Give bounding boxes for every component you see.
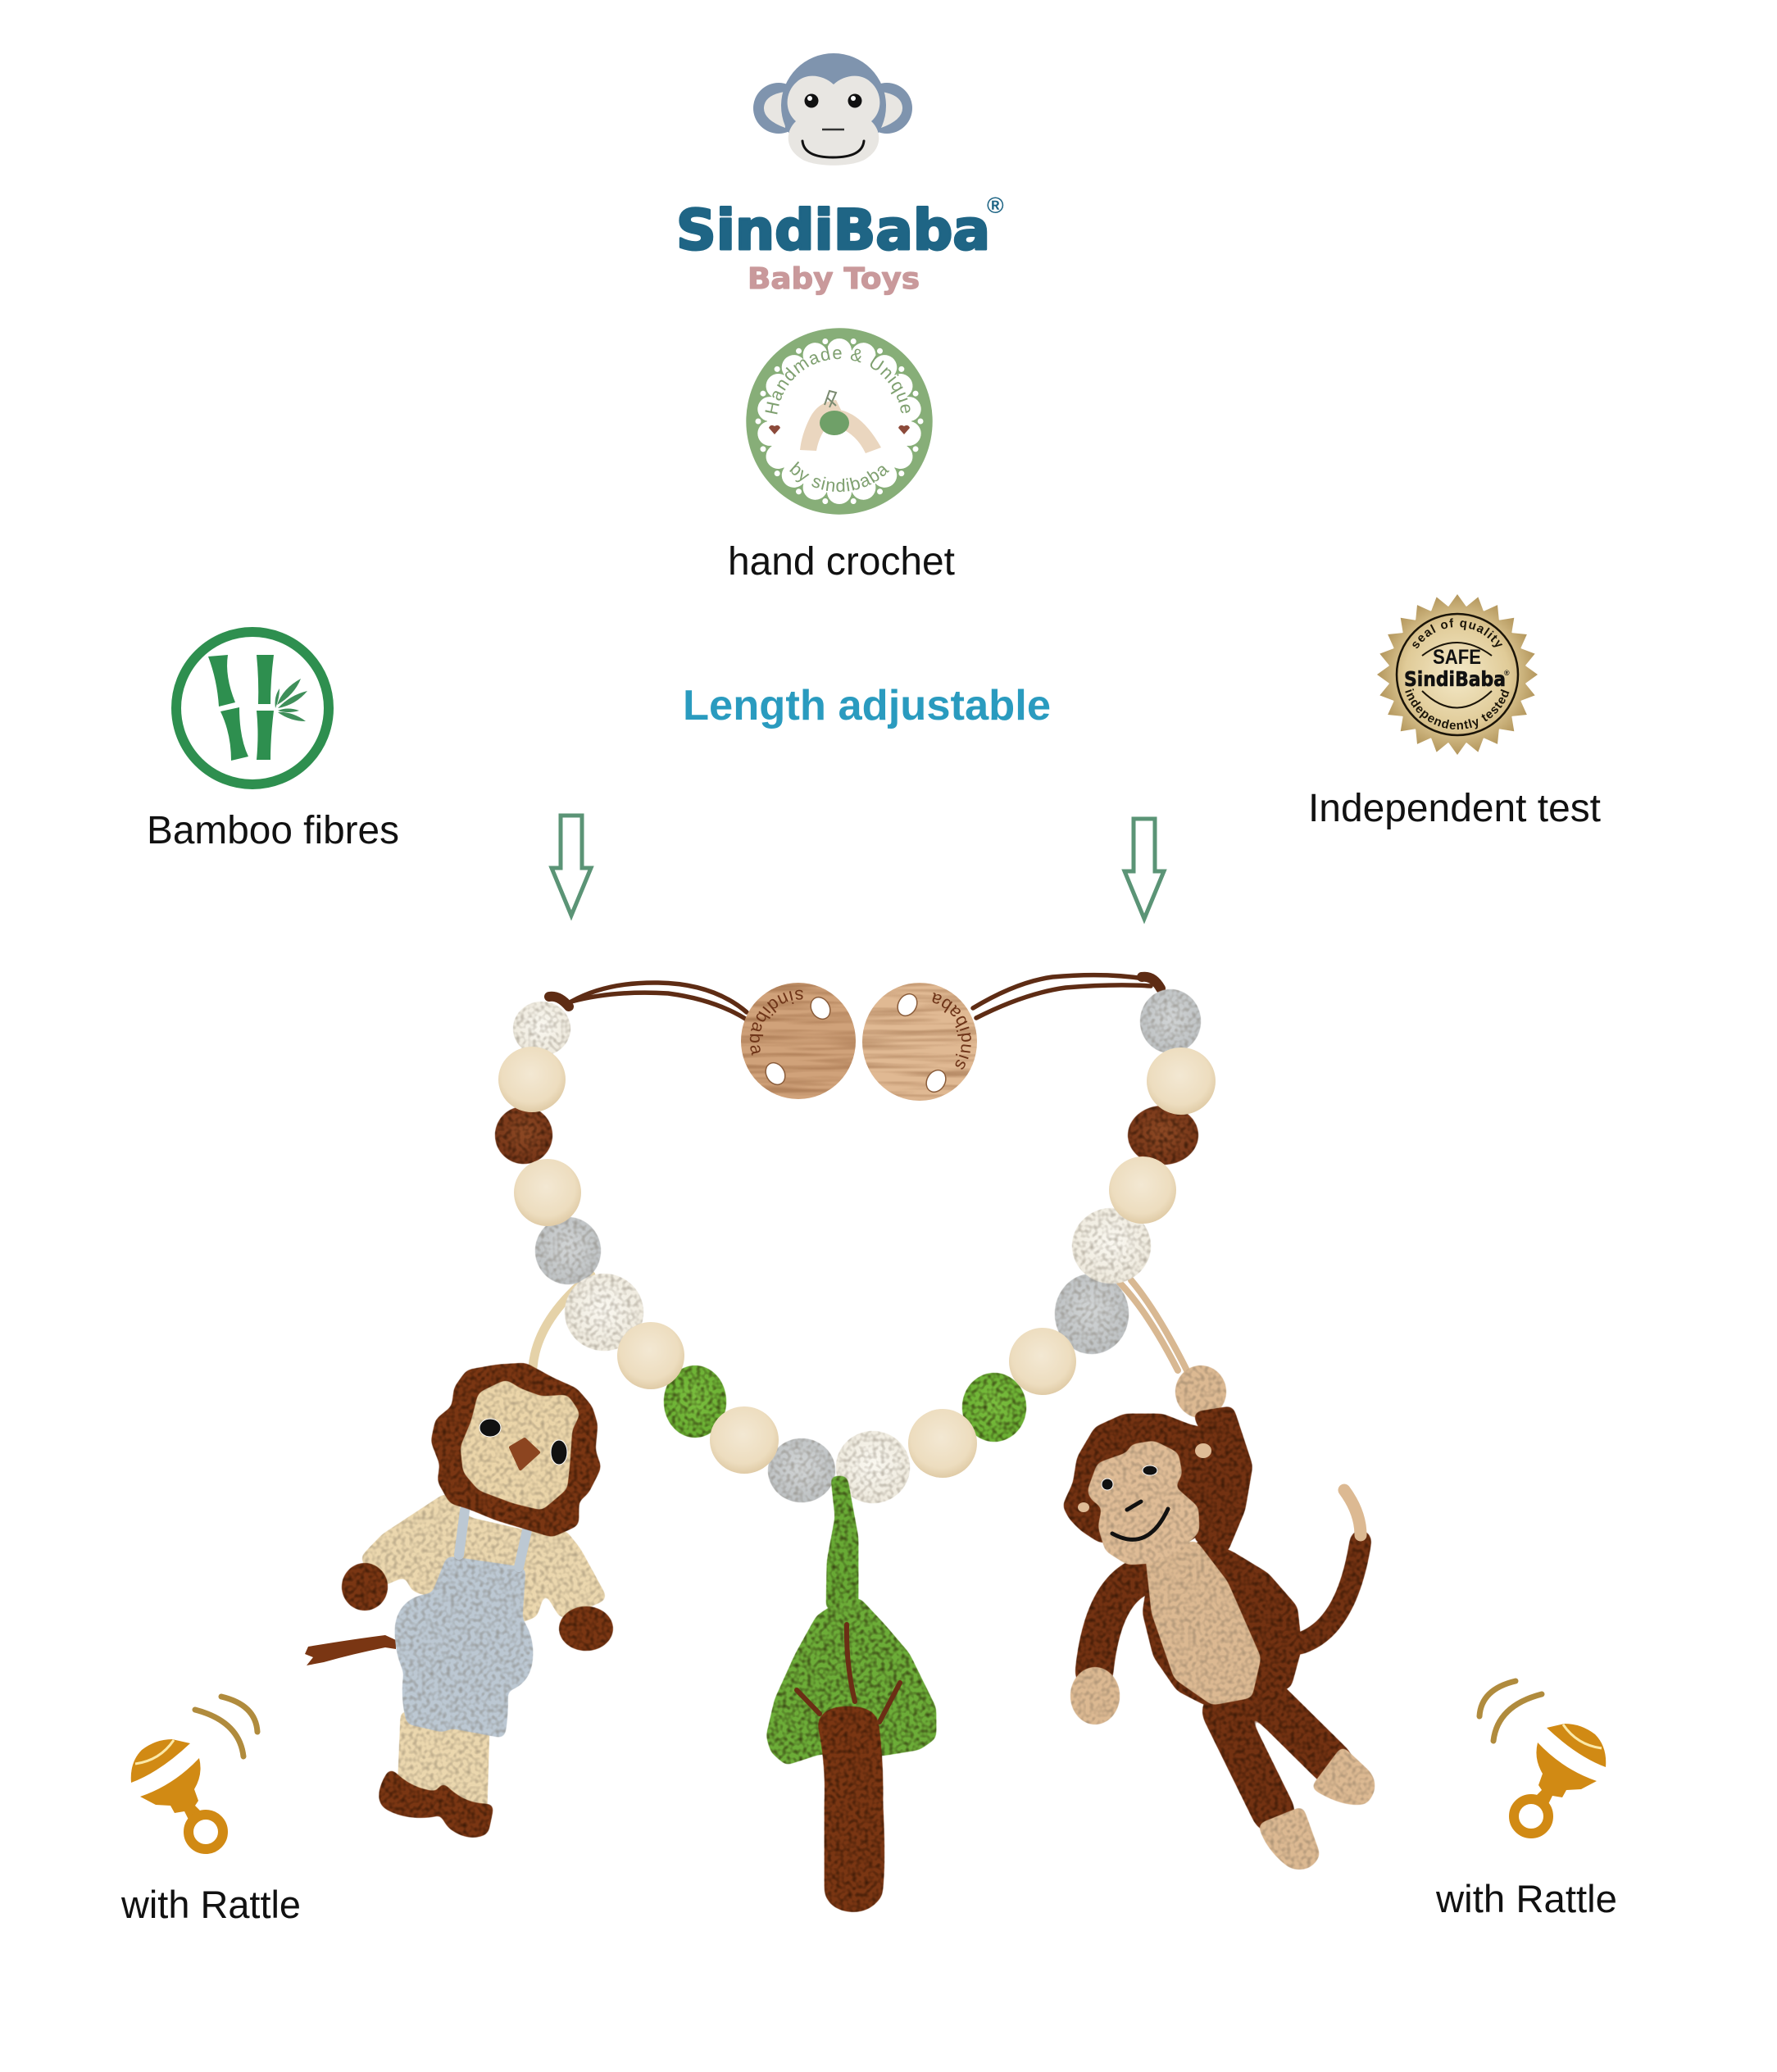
monkey head [1068,1419,1221,1538]
lion overall straps [459,1511,527,1567]
icon: bamboo [176,632,329,784]
elastic cords [549,975,1161,1021]
monkey feet [1262,1751,1371,1866]
heading: length adjustable: Length adjustable [683,682,1051,729]
clip: right wooden clip [862,983,977,1101]
toy: crochet lion [305,1368,613,1834]
scalloped inner disc [756,338,923,505]
icon: right rattle [1479,1681,1606,1833]
lion nose [511,1439,539,1469]
arrow: left length adjust [552,816,591,916]
clip: left wooden clip [741,983,856,1099]
lion face [465,1384,575,1506]
lion tail [305,1635,396,1665]
sound waves [195,1697,257,1756]
monkey raised arm [1199,1411,1248,1548]
icon: hearts [769,425,910,434]
tree canopy [770,1602,932,1761]
label: hand crochet: hand crochet [728,540,955,584]
monkey hanging hand [1175,1365,1226,1418]
clip text: sindibaba [933,993,971,1070]
monkey tail tip [1344,1490,1361,1535]
bamboo leaves [275,679,307,721]
lion legs [399,1713,488,1813]
monkey nose and smile [1112,1502,1168,1539]
lion overalls [398,1560,529,1734]
label: left with rattle: with Rattle [120,1883,301,1926]
monkey left hand [1070,1667,1120,1724]
seal SAFE: SAFE [1433,646,1481,669]
lion mane [436,1368,596,1532]
straps to lion and monkey [533,1275,1187,1370]
monkey left arm [1094,1575,1143,1672]
monkey tail [1298,1541,1361,1644]
lion eyes [479,1419,567,1465]
monkey tummy [1150,1545,1257,1701]
seal SindiBaba: SindiBaba [1404,667,1506,691]
icon: crocheting hands [800,391,881,453]
registered mark: ® [987,193,1004,218]
label: right with rattle: with Rattle [1435,1877,1617,1920]
monkey face [1092,1445,1195,1561]
badge top text: Handmade & Unique [765,347,910,415]
seal top text: seal of quality [1412,618,1503,649]
arrow: right length adjust [1125,819,1164,919]
toy: crochet tree [770,1479,932,1911]
tree trunk [820,1708,883,1911]
monkey eyes [1102,1465,1157,1490]
seal: independently tested [1377,594,1538,755]
label: bamboo fibres: Bamboo fibres [147,809,399,852]
tree hanging strap [829,1479,855,1606]
clip text: sindibaba [749,990,803,1056]
monkey legs [1224,1697,1332,1811]
badge bottom text: by sindibaba [789,461,890,492]
lion hands [342,1563,388,1611]
lion arms and torso [366,1499,601,1620]
logo: SindiBaba monkey and wordmark [676,53,1004,296]
icon: monkey head [753,53,912,166]
label: independent test: Independent test [1308,787,1601,830]
monkey body [1148,1545,1297,1701]
tagline: Baby Toys [748,262,920,296]
monkey ears [1078,1443,1211,1512]
badge: handmade and unique [746,328,933,515]
brand name: SindiBaba [676,198,990,263]
icon: left rattle [131,1697,257,1849]
sound waves [1479,1681,1542,1741]
tree branches [797,1624,900,1722]
beads [495,989,1216,1503]
photo: pram chain [305,972,1375,1913]
lion feet [382,1773,490,1834]
seal registered mark: ® [1504,669,1510,677]
seal bottom text: independently tested [1405,688,1510,729]
toy: crochet monkey [1068,1365,1371,1866]
